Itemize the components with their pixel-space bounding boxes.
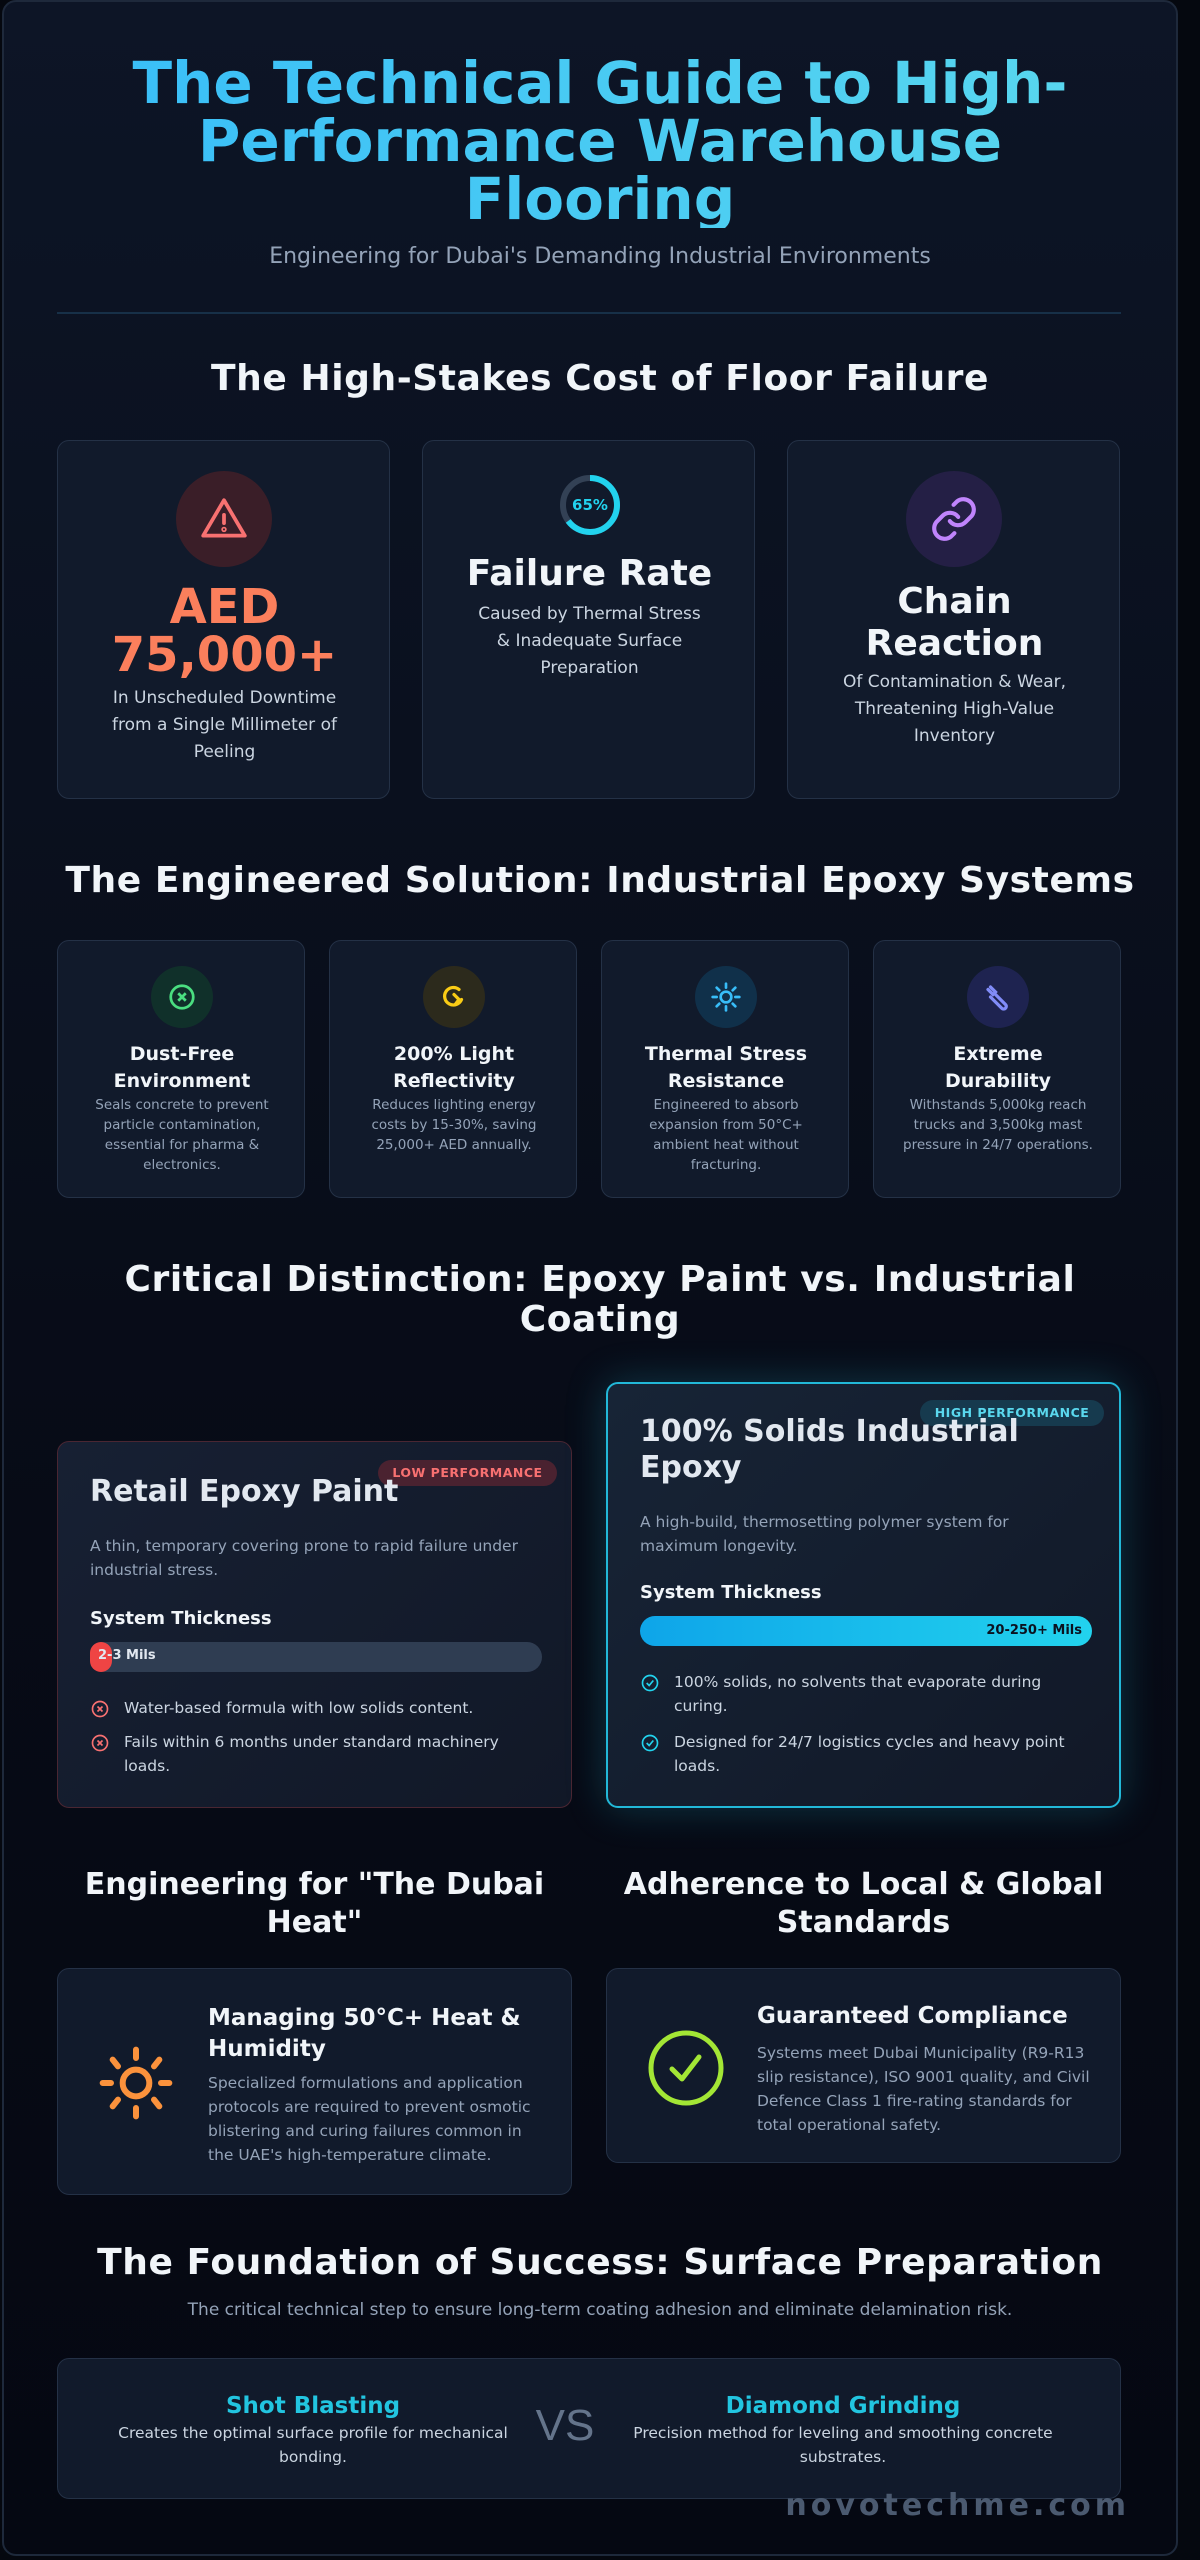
bullets (642, 1673, 1065, 1775)
heading: Failure Rate (467, 553, 712, 594)
title: Durability (945, 1070, 1051, 1092)
method: diamond grinding: Diamond Grinding (726, 2393, 960, 2419)
label: System Thickness (640, 1582, 822, 1603)
icon: bulb (423, 966, 485, 1028)
description: Withstands 5,000kg reach trucks and 3,500kg mast pressure in 24/7 operations. (903, 1097, 1093, 1153)
stat (112, 579, 337, 683)
title (945, 1043, 1051, 1092)
heading (866, 581, 1043, 664)
badge: high performance: HIGH PERFORMANCE (935, 1405, 1089, 1420)
description: In Unscheduled Downtime from a Single Millimeter of Peeling (112, 688, 337, 762)
title (393, 1043, 515, 1092)
heading: dubai heat: Engineering for "The Dubai Heat" (85, 1867, 544, 1940)
panel: AED cost (57, 440, 390, 799)
icon: sun (695, 966, 757, 1028)
description: Engineered to absorb expansion from 50°C+ ambient heat without fracturing. (649, 1097, 803, 1173)
panel: failure rate (422, 440, 755, 799)
description: A thin, temporary covering prone to rapid failure under industrial stress. (90, 1537, 518, 1579)
description: A high-build, thermosetting polymer system for maximum longevity. (640, 1513, 1009, 1555)
label: System Thickness (90, 1608, 272, 1629)
watermark: novotechme.com (785, 2488, 1130, 2523)
title: Dust-Free (130, 1043, 234, 1065)
heading: standards: Adherence to Local & Global Standards (624, 1867, 1103, 1940)
bar: 2-3 mils (90, 1642, 542, 1672)
icon: wrench (967, 966, 1029, 1028)
panel: surface prep comparison (57, 2358, 1121, 2499)
description: Of Contamination & Wear, Threatening High-Value Inventory (843, 672, 1066, 746)
bar: 20-250+ mils: 20-250+ Mils (986, 1623, 1082, 1638)
panel: retail epoxy paint (57, 1441, 572, 1808)
bullets: 100% solids, no solvents that evaporate during curing. (674, 1673, 1041, 1715)
description: Caused by Thermal Stress & Inadequate Surface Preparation (478, 604, 701, 678)
heading: Chain (897, 581, 1012, 622)
subtitle: Engineering for Dubai's Demanding Industrial Environments (269, 244, 931, 269)
bullets: Fails within 6 months under standard machinery loads. (124, 1733, 499, 1775)
method: shot blasting (118, 2393, 508, 2466)
heading: critical distinction: Critical Distinction: Epoxy Paint vs. Industrial Coating (124, 1259, 1076, 1340)
heading: Reaction (866, 623, 1043, 664)
title (644, 1043, 807, 1092)
icon: warning (176, 471, 272, 567)
method: diamond grinding: Precision method for leveling and smoothing concrete substrates. (633, 2424, 1053, 2466)
title: 200% Light (394, 1043, 514, 1065)
stat: AED (170, 579, 279, 635)
panel: compliance (606, 1968, 1121, 2163)
heading: foundation: The Foundation of Success: Surface Preparation (97, 2242, 1103, 2283)
panel: dust-free (57, 940, 305, 1198)
badge: low performance: LOW PERFORMANCE (392, 1465, 543, 1480)
title: Extreme (953, 1043, 1043, 1065)
bar: 2-3 mils: 2-3 Mils (98, 1648, 156, 1663)
title: Thermal Stress (645, 1043, 807, 1065)
icon: x circle (151, 966, 213, 1028)
description: Specialized formulations and application protocols are required to prevent osmotic blistering and curing failures common in the UAE's high-temperature climate. (208, 2074, 531, 2164)
panel: chain reaction (787, 440, 1120, 799)
icon: sun (100, 2046, 172, 2120)
heading: Guaranteed Compliance (757, 2003, 1068, 2029)
panel: heat (57, 1968, 572, 2195)
description: Systems meet Dubai Municipality (R9-R13 slip resistance), ISO 9001 quality, and Civil Defence Class 1 fire-rating standards for total operational safety. (757, 2044, 1090, 2134)
method: diamond grinding (633, 2393, 1053, 2466)
bullets: Water-based formula with low solids content. (124, 1699, 473, 1717)
title: Retail Epoxy Paint (90, 1474, 398, 1509)
title: Resistance (668, 1070, 784, 1092)
badge: high performance (920, 1400, 1104, 1426)
panel: reflectivity (329, 940, 577, 1198)
title: Reflectivity (393, 1070, 515, 1092)
icon: 65% ring (560, 475, 620, 535)
title: 100% Solids Industrial Epoxy (640, 1414, 1019, 1485)
icon: chain (906, 471, 1002, 567)
bar: 20-250+ mils (640, 1616, 1092, 1646)
panel: thermal (601, 940, 849, 1198)
heading: Managing 50°C+ Heat & Humidity (208, 2005, 521, 2062)
title: The Technical Guide to High-Performance Warehouse Flooring (133, 49, 1067, 233)
description: Reduces lighting energy costs by 15-30%, saving 25,000+ AED annually. (372, 1097, 536, 1153)
icon: 65% ring: 65% (572, 496, 608, 514)
icon: check circle (648, 2030, 724, 2106)
heading: high-stakes: The High-Stakes Cost of Floor Failure (211, 358, 989, 399)
bullets (92, 1699, 499, 1775)
title (114, 1043, 250, 1092)
panel: durability (873, 940, 1121, 1198)
vs: VS (536, 2401, 594, 2450)
description: Seals concrete to prevent particle contamination, essential for pharma & electronics. (95, 1097, 269, 1173)
badge: low performance (378, 1460, 557, 1486)
bullets: Designed for 24/7 logistics cycles and heavy point loads. (674, 1733, 1065, 1775)
method: shot blasting: Creates the optimal surface profile for mechanical bonding. (118, 2424, 508, 2466)
heading: solution: The Engineered Solution: Industrial Epoxy Systems (65, 860, 1135, 901)
subheading: The critical technical step to ensure long-term coating adhesion and eliminate delamination risk. (188, 2300, 1012, 2320)
title: Environment (114, 1070, 250, 1092)
stat: 75,000+ (112, 627, 337, 683)
method: shot blasting: Shot Blasting (226, 2393, 400, 2419)
panel: industrial epoxy (606, 1382, 1121, 1808)
